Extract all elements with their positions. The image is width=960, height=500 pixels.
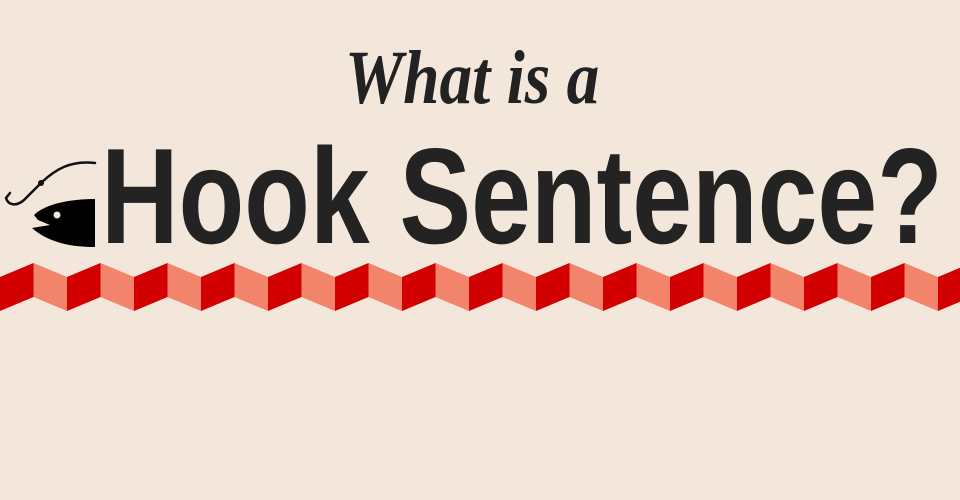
icon: fish on hook	[4, 161, 96, 247]
title: Hook Sentence?: Hook Sentence?	[101, 120, 943, 272]
title: What is a: What is a	[345, 36, 599, 120]
